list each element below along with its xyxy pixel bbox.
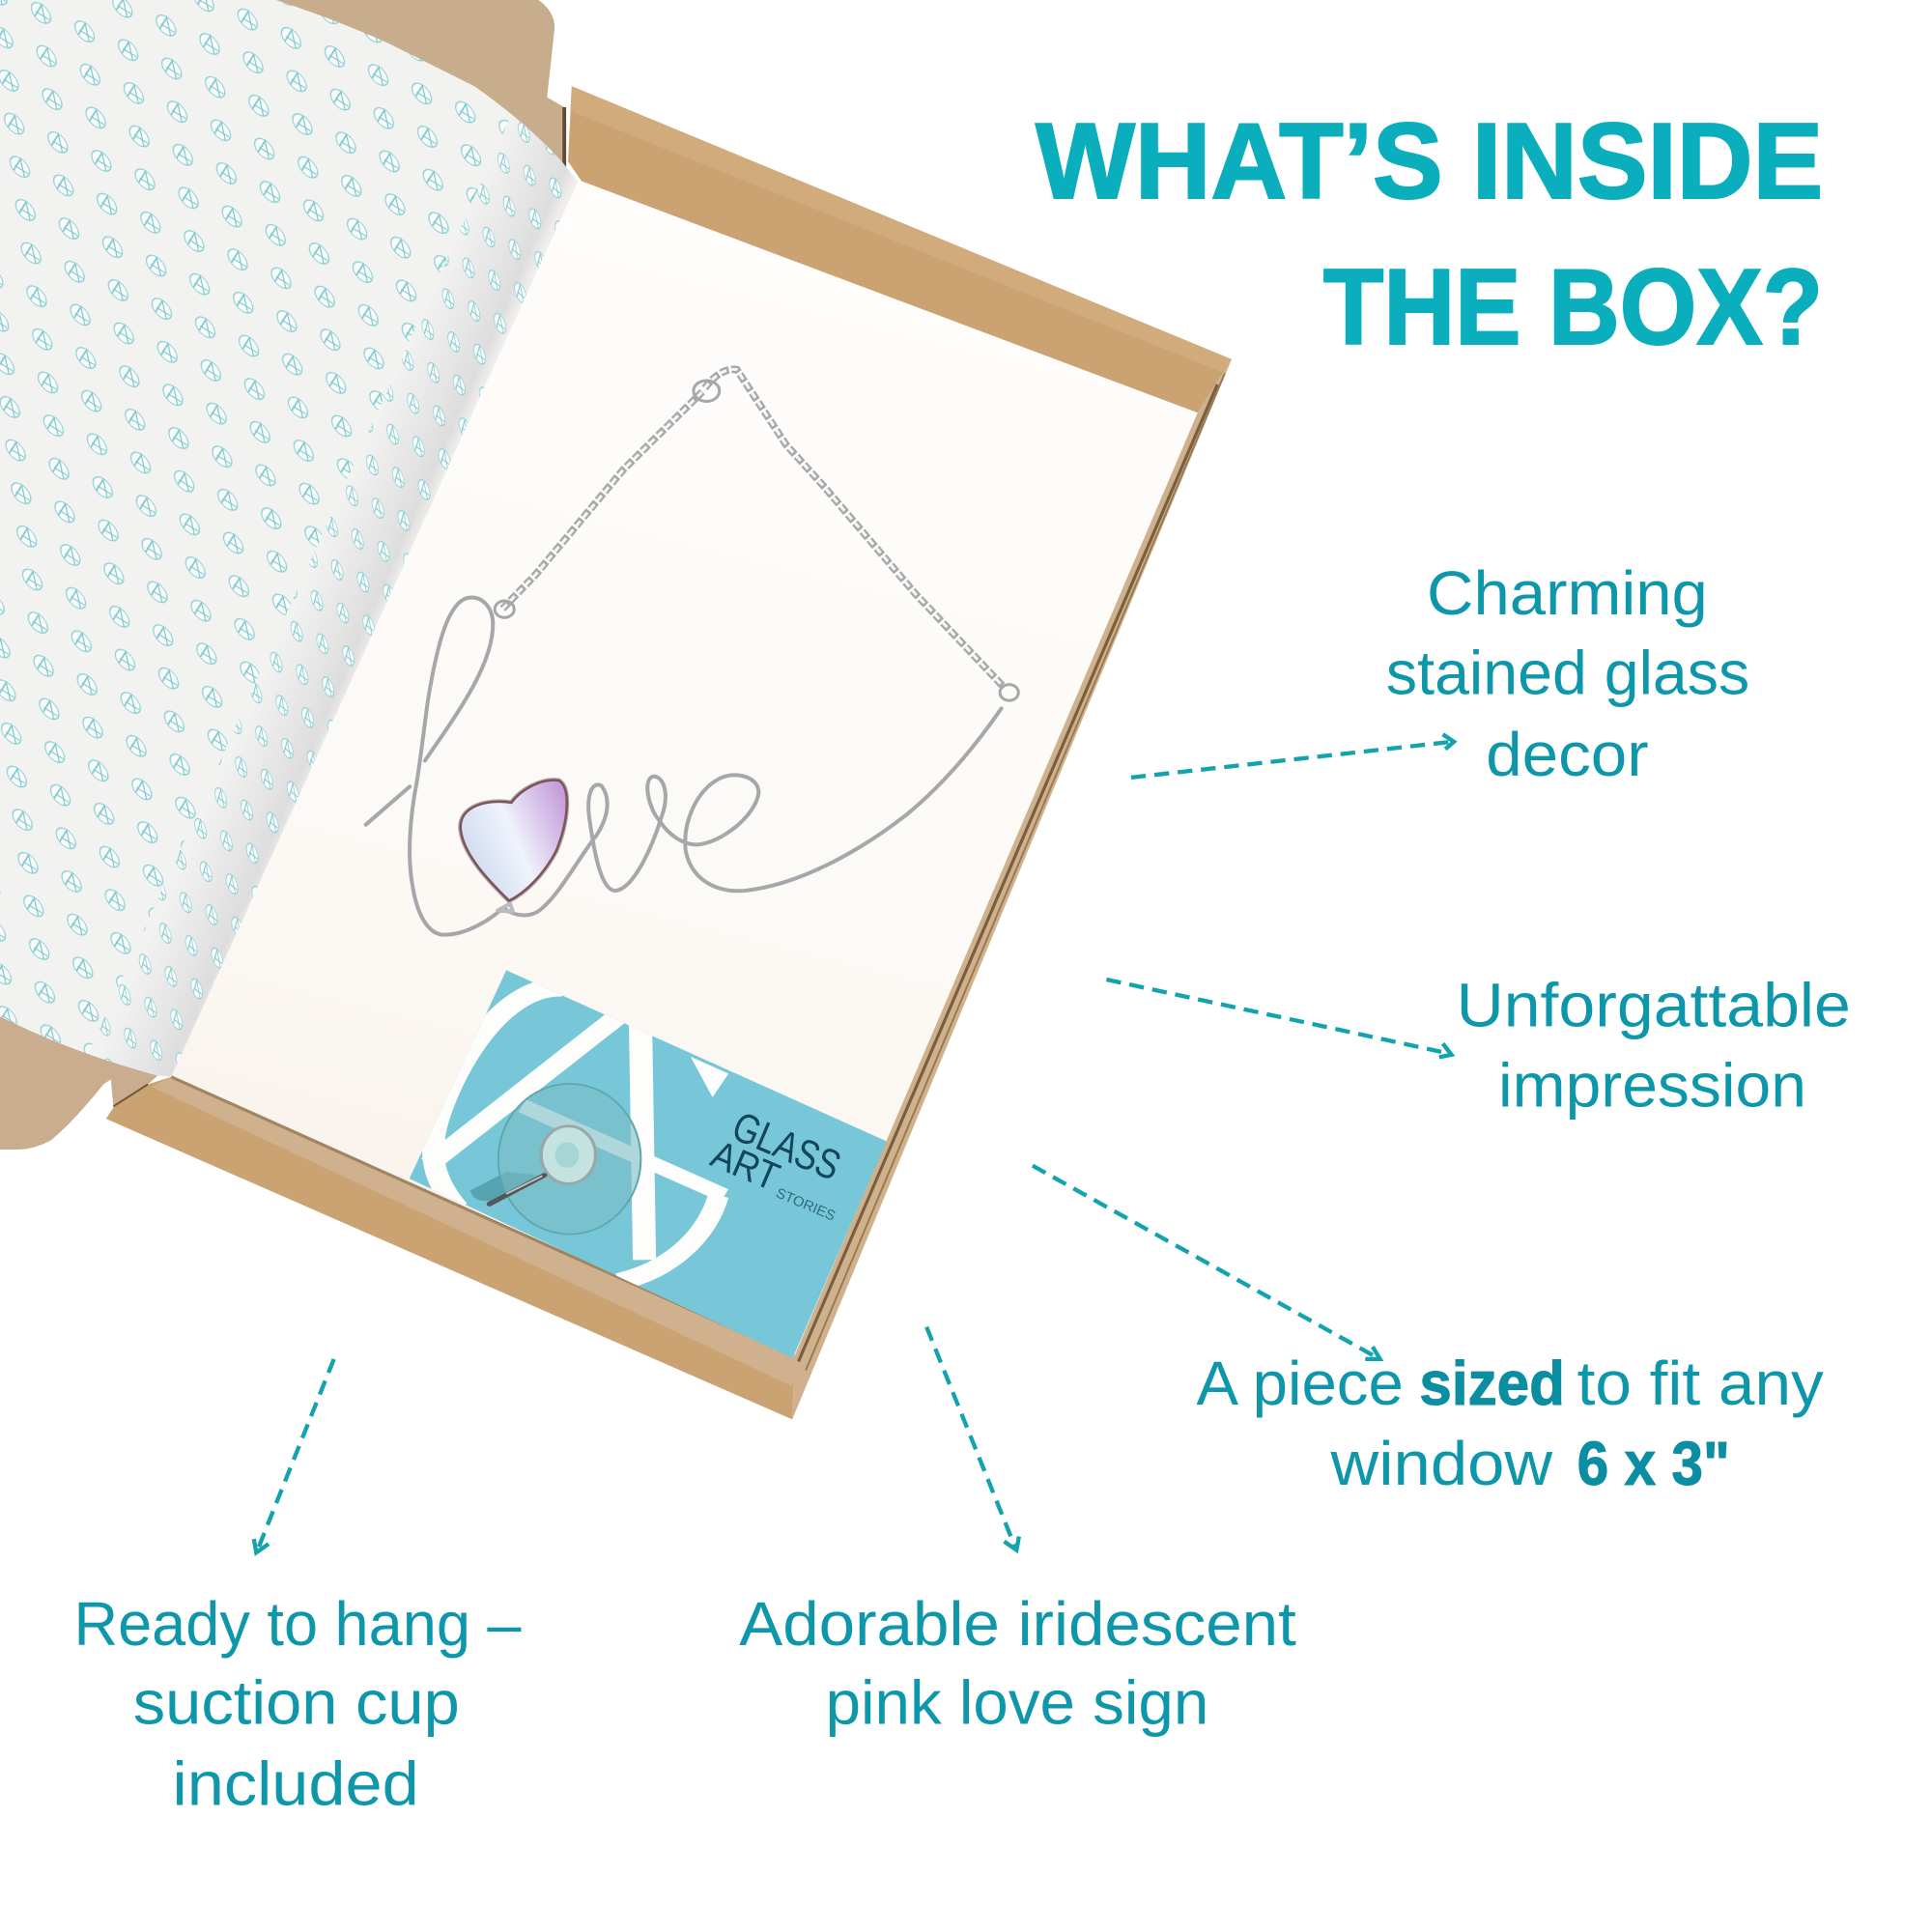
label: stained glass decor <box>1386 558 1749 789</box>
box: foam insert <box>171 176 1198 1355</box>
label: ready to hang: Ready to hang – <box>74 1589 522 1659</box>
box: right wall <box>564 107 1232 1419</box>
suction cup <box>470 1084 640 1235</box>
title: THE BOX? <box>1323 247 1823 367</box>
label: ready to hang <box>74 1589 522 1819</box>
card logo text: ART <box>705 1131 786 1200</box>
label: sized to fit any window: A piece <box>1197 1349 1404 1418</box>
iridescent glass heart <box>461 781 567 900</box>
card logo text <box>705 1103 847 1225</box>
box: top wall <box>568 86 1232 412</box>
label: ready to hang: suction cup <box>133 1667 460 1737</box>
label: stained glass decor: decor <box>1486 720 1649 789</box>
label: iridescent love sign <box>739 1589 1296 1737</box>
label: sized to fit any window: 6 x 3" <box>1577 1429 1730 1498</box>
arrow: to suction cup label <box>254 1359 334 1552</box>
arrow: to stained glass decor label <box>1131 734 1454 778</box>
label: sized to fit any window: window <box>1329 1429 1553 1498</box>
box: left bottom flap <box>0 1016 157 1150</box>
card logo: white monogram <box>428 987 728 1282</box>
label: unforgettable impression <box>1457 970 1851 1120</box>
label: sized to fit any window: sized <box>1419 1349 1565 1418</box>
arrow: to impression label <box>1106 980 1452 1057</box>
card logo text: GLASS <box>725 1103 847 1190</box>
label: stained glass decor: stained glass <box>1386 639 1749 708</box>
card logo text: STORIES <box>774 1185 838 1225</box>
wire script "love" <box>366 381 1018 935</box>
product photo: open kraft box <box>0 0 1232 1419</box>
tissue paper with logo pattern <box>0 0 578 1077</box>
love sign: chain <box>502 369 1005 688</box>
label: ready to hang: included <box>173 1749 419 1819</box>
label: unforgettable impression: Unforgattable <box>1457 970 1851 1039</box>
arrow: to love sign label <box>926 1327 1019 1550</box>
label: iridescent love sign: pink love sign <box>826 1667 1208 1737</box>
love sign: wire lettering and heart <box>366 381 1018 935</box>
label: sized to fit any window: to fit any <box>1577 1349 1824 1418</box>
label: sized to fit any window <box>1197 1349 1824 1498</box>
arrow: to size label <box>1033 1166 1380 1359</box>
title <box>1036 101 1823 367</box>
label: unforgettable impression: impression <box>1498 1050 1806 1120</box>
box: top flap <box>276 0 578 182</box>
label: iridescent love sign: Adorable iridescent <box>739 1589 1296 1659</box>
label: stained glass decor: Charming <box>1427 558 1708 628</box>
title: WHAT’S INSIDE <box>1036 101 1823 221</box>
card background <box>410 970 887 1358</box>
box: bottom wall <box>106 1077 796 1419</box>
business card with suction cup <box>410 970 887 1358</box>
